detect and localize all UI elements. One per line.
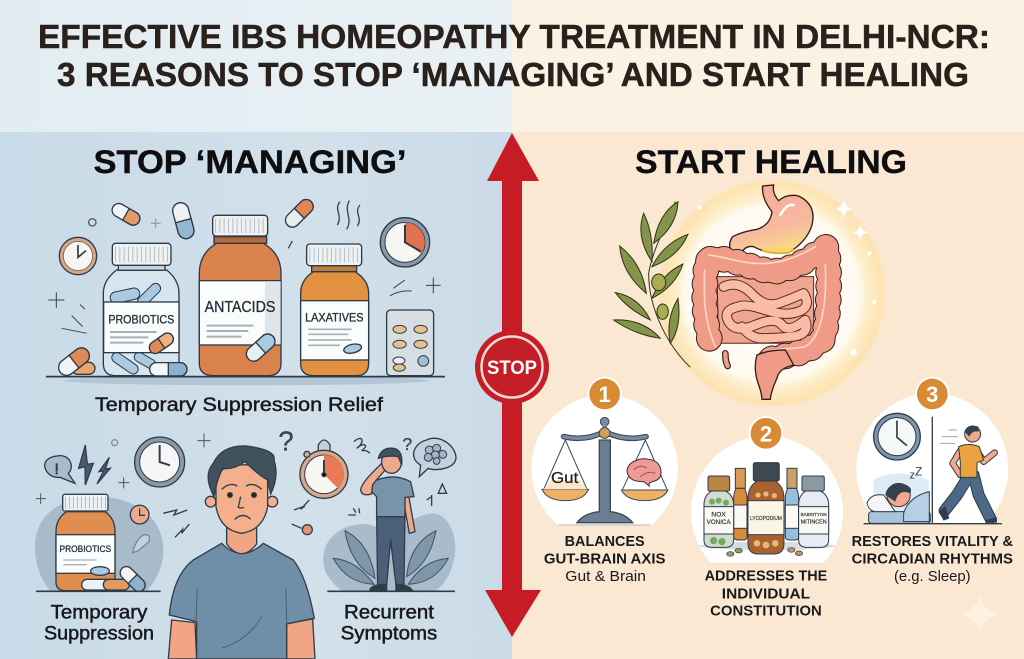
caption 3: [852, 533, 1013, 585]
colon: [704, 247, 829, 366]
benefit 3: rhythms: Z: [915, 465, 922, 479]
caption: recurrent symptoms: [341, 602, 437, 644]
decorative marks: [48, 201, 441, 333]
bottle: laxatives: [301, 244, 369, 376]
person: worried man: [168, 446, 315, 659]
benefit 3: rhythms: [856, 393, 1008, 524]
caption 2: ADDRESSES THE: [705, 568, 827, 585]
caption: recurrent symptoms: Recurrent: [344, 602, 435, 623]
caption 3: CIRCADIAN RHYTHMS: [852, 551, 1013, 568]
bottle: probiotics: [103, 243, 179, 376]
blister pack: [387, 310, 434, 376]
icon: small clock: [130, 505, 149, 524]
panel: benefits: [531, 377, 1013, 634]
small intestine: [724, 285, 807, 338]
arrow: red double arrow with stop sign: STOP: [487, 358, 537, 379]
title: 3 REASONS TO STOP ‘MANAGING’ AND START HEALING: [57, 56, 969, 93]
benefit 2: remedies: VONICA: [707, 519, 731, 526]
sparkle: [960, 595, 999, 634]
halo: [657, 178, 887, 408]
rectum: [755, 350, 794, 399]
badges: [587, 377, 950, 451]
bottle: antacids: [199, 215, 281, 376]
heading: stop managing: STOP ‘MANAGING’: [94, 144, 406, 180]
icon: stopwatch: [300, 440, 348, 498]
caption: temporary suppression: Temporary: [51, 602, 148, 623]
badges: 1: [599, 382, 611, 407]
bottle: antacids: ANTACIDS: [205, 299, 275, 316]
person: man with hand on head: [323, 448, 455, 591]
arrow: red double arrow with stop sign: [475, 133, 549, 637]
bottle: probiotics: PROBIOTICS: [108, 312, 174, 326]
panel: medication shelf: [46, 197, 445, 385]
benefit 2: remedies: BABRITYON: [801, 512, 827, 517]
caption: temporary suppression: Suppression: [44, 623, 154, 644]
benefit 1: balance: [531, 395, 678, 525]
caption 1: [544, 533, 665, 585]
icon: thought bubble: [414, 438, 456, 477]
sparkles: [697, 200, 876, 356]
bottle group: PROBIOTICS: [59, 544, 111, 554]
caption: recurrent symptoms: Symptoms: [341, 623, 437, 644]
question mark: ?: [278, 426, 294, 457]
caption 3: RESTORES VITALITY &: [852, 533, 1013, 550]
icon: small sparks: [36, 433, 447, 537]
caption 2: CONSTITUTION: [710, 603, 822, 620]
panel: lower left symptoms: [35, 426, 456, 659]
title: [38, 18, 990, 93]
caption 3: (e.g. Sleep): [894, 568, 971, 585]
icon: clock right: [380, 218, 430, 267]
small intestine backing: [717, 277, 814, 343]
bottle: laxatives: LAXATIVES: [305, 310, 363, 324]
caption 1: BALANCES: [565, 533, 645, 550]
benefit 3: rhythms: z: [910, 469, 915, 481]
benefit 2: remedies: MITINCEN: [801, 519, 827, 525]
icon: wall clock: [135, 437, 185, 487]
caption 2: [705, 568, 827, 620]
caption: temporary suppression: [44, 602, 154, 644]
benefit 2: remedies: NOX: [711, 512, 726, 519]
capsules: [55, 197, 316, 379]
olive branch: [614, 202, 690, 367]
icon: clock left: [59, 237, 97, 275]
heading: start healing: START HEALING: [635, 144, 907, 180]
icon: dropper: [133, 535, 149, 553]
caption: temporary suppression relief: Temporary Suppression Relief: [95, 395, 384, 416]
stomach: [730, 185, 813, 256]
benefit 1: balance: Gut: [551, 470, 579, 487]
scribble and question: ?: [402, 434, 412, 454]
badges: 3: [926, 382, 938, 407]
title: EFFECTIVE IBS HOMEOPATHY TREATMENT IN DELHI-NCR:: [38, 18, 990, 55]
icon: alert and lightning: [45, 445, 110, 485]
caption 1: GUT-BRAIN AXIS: [544, 551, 665, 568]
bottle group: [35, 494, 163, 594]
shelf: [46, 376, 445, 385]
caption 1: Gut & Brain: [565, 568, 646, 585]
scribble and question: [354, 434, 412, 454]
benefit 2: remedies: [691, 436, 843, 563]
caption 2: INDIVIDUAL: [722, 585, 810, 602]
benefit 2: remedies: LYCOPODIUM: [750, 516, 782, 522]
badges: 2: [760, 421, 772, 446]
panel: healing gut: [614, 178, 887, 408]
